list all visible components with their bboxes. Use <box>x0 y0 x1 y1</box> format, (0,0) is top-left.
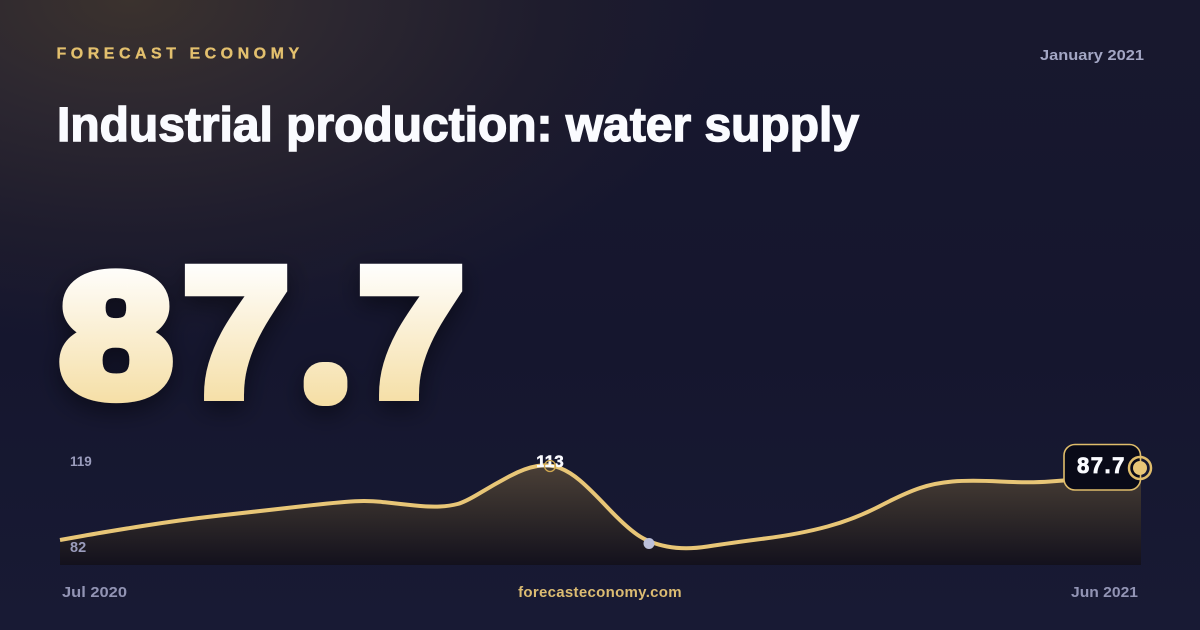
big value <box>60 230 464 434</box>
current value marker <box>1129 457 1151 479</box>
axis min label: 82 <box>70 540 86 556</box>
date label: January 2021 <box>1040 47 1144 64</box>
sparkline chart <box>60 444 1151 565</box>
brand label: FORECAST ECONOMY <box>56 46 304 62</box>
big value: 7 <box>358 230 464 434</box>
start date label: Jul 2020 <box>62 584 127 601</box>
big value: 8 <box>60 240 171 432</box>
big value: 7 <box>183 230 289 434</box>
title: Industrial production: water supply <box>57 99 859 152</box>
current value badge: 87.7 <box>1077 453 1126 478</box>
low marker <box>644 538 654 549</box>
area under curve <box>60 465 1141 565</box>
axis max label: 119 <box>70 454 92 469</box>
peak marker <box>544 460 556 472</box>
big value: . <box>320 352 331 396</box>
trend line <box>60 465 1070 548</box>
website: forecasteconomy.com <box>518 584 682 601</box>
peak value label: 113 <box>536 452 564 471</box>
end date label: Jun 2021 <box>1071 584 1138 601</box>
current value badge <box>1064 444 1140 490</box>
